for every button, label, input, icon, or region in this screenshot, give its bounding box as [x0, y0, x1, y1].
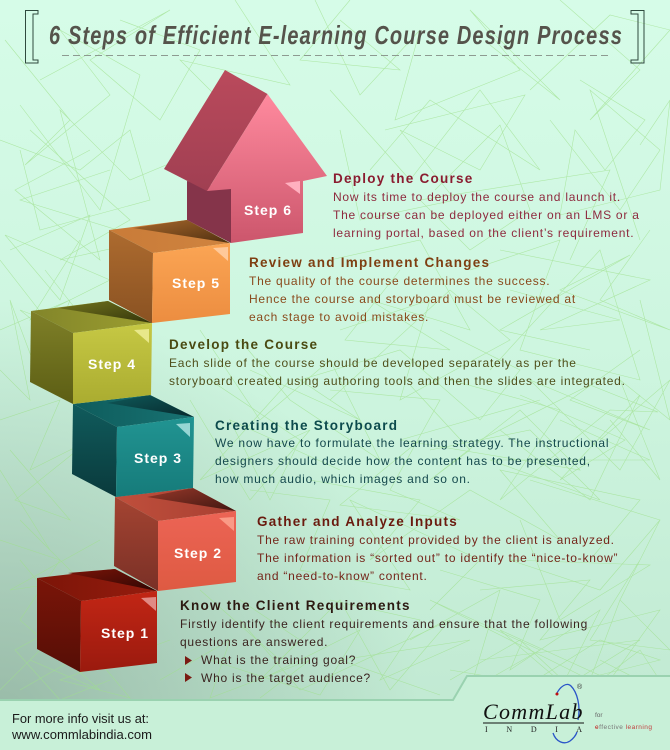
title block [26, 10, 644, 63]
footer band [0, 676, 670, 750]
text: know the client requirements: Know the Client Requirements [180, 598, 411, 613]
text: develop the course: storyboard created using authoring tools and then the slides are integrated. [169, 374, 626, 388]
logo: CommLab India [483, 683, 652, 743]
text: develop the course: Develop the Course [169, 337, 318, 352]
text: deploy the course: Deploy the Course [333, 171, 474, 186]
step 5 box: Step 5 [172, 275, 220, 291]
logo: CommLab India: ® [577, 683, 583, 691]
text: develop the course: Each slide of the course should be developed separately as per the [169, 356, 577, 370]
text: deploy the course: learning portal, based on the client’s requirement. [333, 226, 634, 240]
text: gather and analyze inputs: and “need-to-know” content. [257, 569, 428, 583]
step 1 box [37, 569, 157, 672]
step 6 arrow [164, 70, 327, 243]
left bracket [26, 10, 38, 63]
text: review and implement changes [249, 255, 576, 324]
text: creating the storyboard: designers should decide how the content has to be presented, [215, 454, 591, 468]
right bracket [631, 10, 644, 63]
text: develop the course [169, 337, 626, 388]
footer contact text: www.commlabindia.com [11, 727, 152, 742]
text: creating the storyboard: Creating the Storyboard [215, 418, 398, 433]
step 1 box: Step 1 [101, 625, 149, 641]
step 3 box: Step 3 [134, 450, 182, 466]
text: deploy the course [333, 171, 640, 240]
text: creating the storyboard [215, 418, 609, 486]
text: gather and analyze inputs: The information is “sorted out” to identify the “nice-to-know” [257, 551, 618, 565]
text: know the client requirements: What is the training goal? [201, 653, 356, 667]
text: gather and analyze inputs: Gather and Analyze Inputs [257, 514, 458, 529]
step 5 box [109, 220, 230, 323]
step 6 arrow: Step 6 [244, 202, 292, 218]
logo: CommLab India: effective learning [595, 724, 652, 731]
text: review and implement changes: each stage to avoid mistakes. [249, 310, 429, 324]
text: review and implement changes: The quality of the course determines the success. [249, 274, 550, 288]
text: review and implement changes: Review and Implement Changes [249, 255, 490, 270]
step 4 box [30, 301, 152, 404]
text: creating the storyboard: how much audio, which images and so on. [215, 472, 471, 486]
footer contact text: For more info visit us at: [12, 711, 149, 726]
step 4 box: Step 4 [88, 356, 136, 372]
step 3 box [72, 395, 194, 497]
footer contact text [11, 711, 152, 742]
logo: CommLab India: CommLab [483, 699, 584, 724]
text: deploy the course: The course can be deployed either on an LMS or a [333, 208, 640, 222]
text: gather and analyze inputs [257, 514, 618, 583]
step 2 box [114, 488, 236, 591]
step 2 box: Step 2 [174, 545, 222, 561]
text: deploy the course: Now its time to deploy the course and launch it. [333, 190, 621, 204]
text: know the client requirements [180, 598, 588, 685]
logo: CommLab India: for [595, 712, 603, 719]
text: review and implement changes: Hence the course and storyboard must be reviewed at [249, 292, 576, 306]
text: know the client requirements: Who is the target audience? [201, 671, 371, 685]
logo: CommLab India: I N D I A [485, 725, 582, 734]
text: creating the storyboard: We now have to formulate the learning strategy. The instructional [215, 436, 609, 450]
text: gather and analyze inputs: The raw training content provided by the client is analyzed. [257, 533, 615, 547]
text: know the client requirements: questions are answered. [180, 635, 328, 649]
text: know the client requirements: Firstly identify the client requirements and ensure that the following [180, 617, 588, 631]
